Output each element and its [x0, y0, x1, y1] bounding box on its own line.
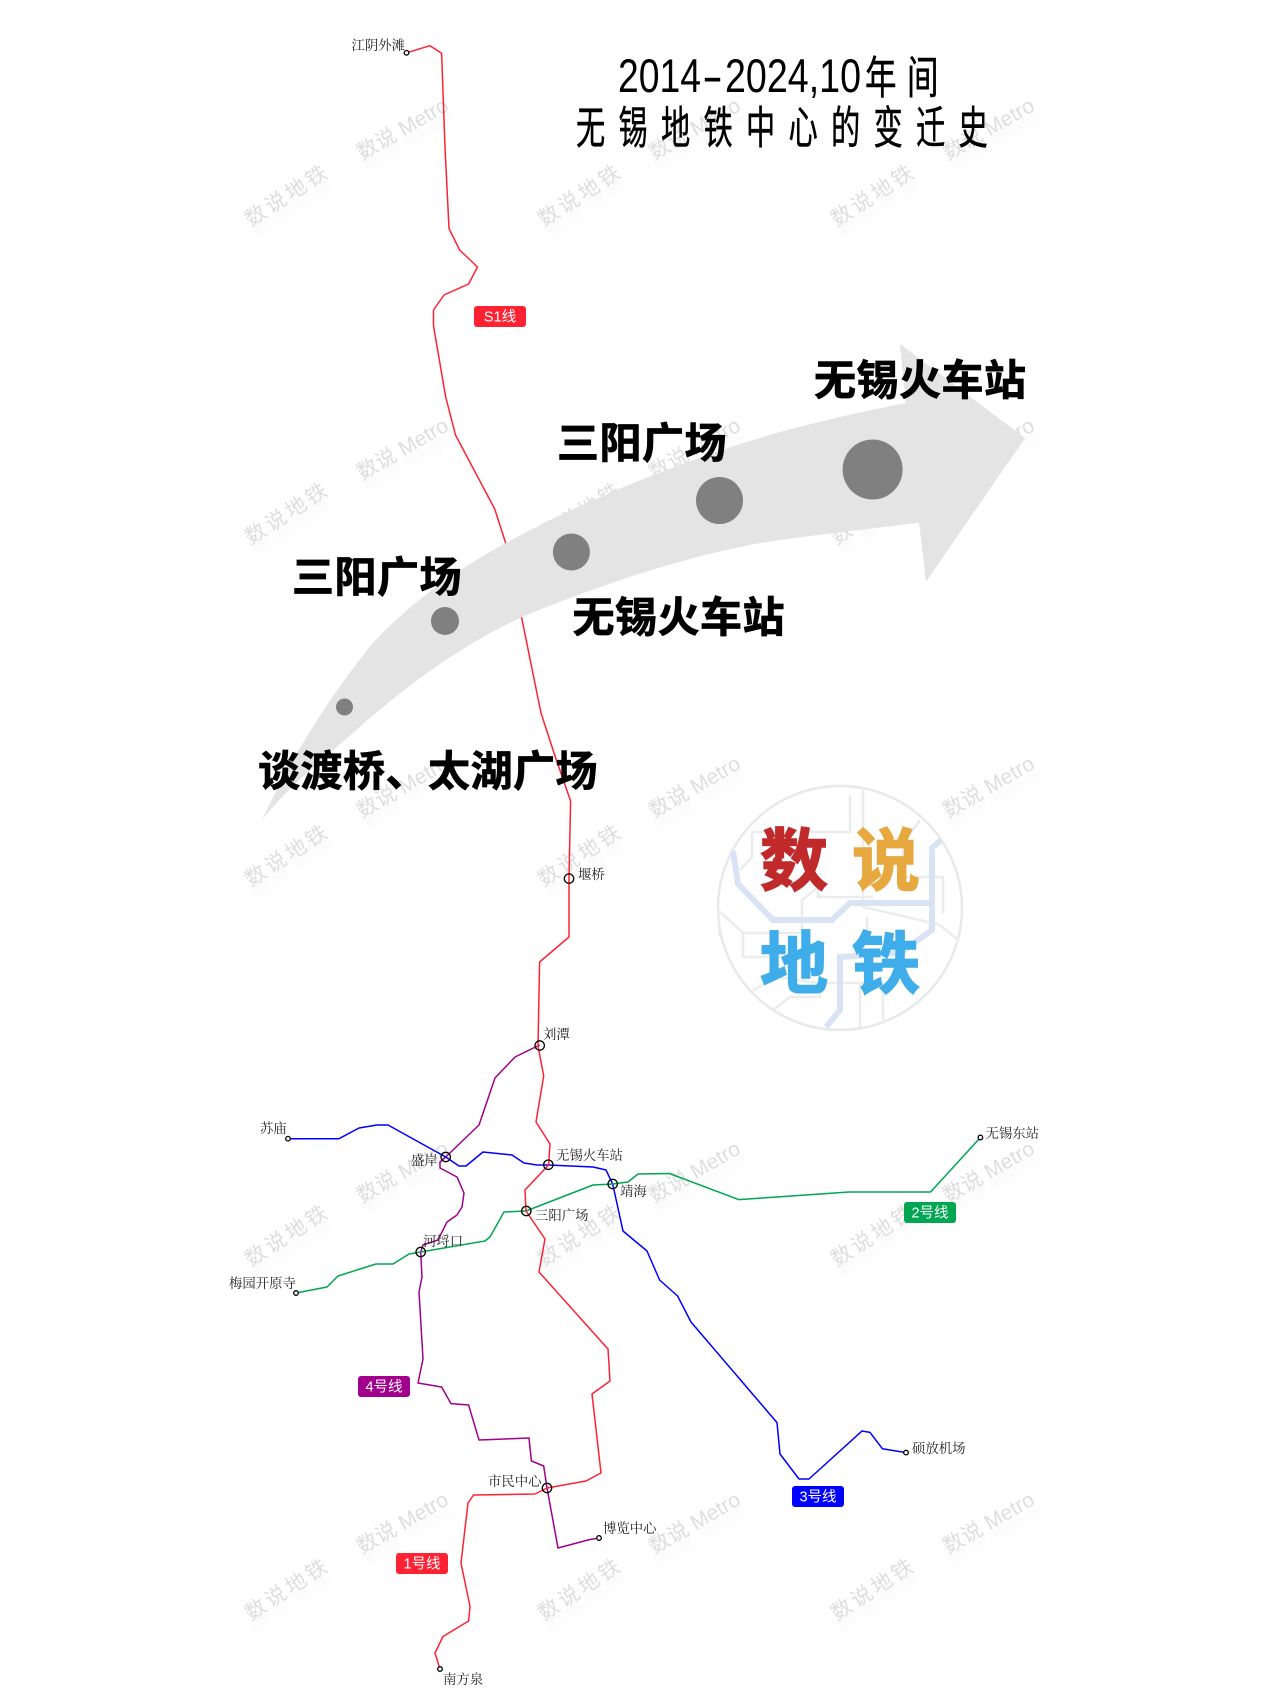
title: 年: [865, 43, 897, 107]
logo: 数说地铁: 地: [760, 927, 828, 1003]
station names: 无锡火车站: [556, 1145, 623, 1164]
watermarks: 数说 Metro: [353, 1488, 452, 1559]
station names: 梅园开原寺: [229, 1273, 296, 1292]
line badge: 3: [792, 1486, 844, 1507]
line badge: 2: [904, 1202, 956, 1223]
watermarks: 数说地铁: [534, 478, 627, 549]
line badge: S1: [474, 306, 526, 327]
watermarks: 数说地铁: [827, 1554, 920, 1625]
logo: 数说地铁: 数: [760, 824, 828, 900]
watermarks: 数说 Metro: [645, 752, 744, 823]
station names: 硕放机场: [912, 1438, 966, 1457]
station names: 靖海: [620, 1181, 647, 1200]
line badge: 2: 2号线: [911, 1204, 949, 1222]
title: [576, 43, 1001, 157]
watermarks: 数说 Metro: [353, 94, 452, 165]
station names: 江阴外滩: [352, 35, 405, 54]
station names: [229, 35, 1039, 1688]
line badge: 4: [358, 1376, 410, 1397]
line badge: 1: [396, 1553, 448, 1574]
watermarks: 数说地铁: [241, 1200, 334, 1271]
watermarks: 数说 Metro: [939, 752, 1038, 823]
logo: 数说地铁: [718, 786, 962, 1030]
station names: 刘潭: [543, 1024, 570, 1043]
watermarks: 数说 Metro: [939, 1488, 1038, 1559]
watermarks: 数说地铁: [241, 1554, 334, 1625]
arrow: growth trend: [262, 344, 1025, 820]
line badge: 4: 4号线: [365, 1378, 403, 1396]
line badge: 1: 1号线: [403, 1556, 441, 1572]
label: 无锡火车站 2024: 无锡火车站: [814, 357, 1027, 404]
terminal stations: [286, 50, 983, 1671]
label: 无锡火车站 lower: 无锡火车站: [572, 594, 785, 641]
watermarks: 数说地铁: [827, 478, 920, 549]
arrow stop markers: [336, 440, 903, 716]
watermarks: 数说地铁: [241, 160, 334, 231]
line 4: [418, 1045, 599, 1548]
watermarks: 数说地铁: [827, 160, 920, 231]
label: 三阳广场 lower: 三阳广场: [292, 554, 462, 601]
title: 无锡地铁中心的变迁史: [576, 91, 1001, 157]
watermarks: 数说地铁: [241, 820, 334, 891]
watermarks: 数说 Metro: [353, 1137, 452, 1208]
station names: 盛岸: [411, 1150, 438, 1169]
station names: 堰桥: [578, 864, 605, 883]
title: 间: [907, 43, 939, 107]
watermarks: 数说 Metro: [645, 1488, 744, 1559]
line 3: [288, 1125, 906, 1479]
watermarks: 数说地铁: [534, 1554, 627, 1625]
watermarks: 数说 Metro: [939, 94, 1038, 165]
station names: 无锡东站: [986, 1123, 1039, 1142]
watermarks: [241, 94, 1038, 1625]
station names: 河埒口: [423, 1231, 463, 1250]
line badge: 3: 3号线: [799, 1488, 837, 1506]
line 1 and S1: [406, 46, 610, 1669]
watermarks: 数说 Metro: [939, 414, 1038, 485]
station names: 苏庙: [260, 1118, 287, 1137]
line 2: [296, 1138, 980, 1293]
interchange stations: [416, 874, 617, 1493]
station names: 市民中心: [488, 1471, 542, 1490]
watermarks: 数说地铁: [241, 478, 334, 549]
watermarks: 数说 Metro: [939, 1137, 1038, 1208]
watermarks: 数说地铁: [534, 820, 627, 891]
title: 2014: [618, 49, 701, 102]
watermarks: 数说地铁: [534, 160, 627, 231]
watermarks: 数说 Metro: [645, 414, 744, 485]
label: 谈渡桥、太湖广场: 谈渡桥、太湖广场: [258, 748, 598, 795]
station names: 南方泉: [443, 1669, 483, 1688]
watermarks: 数说 Metro: [353, 752, 452, 823]
station names: 三阳广场: [535, 1205, 589, 1224]
watermarks: 数说地铁: [827, 820, 920, 891]
logo: 数说地铁: 铁: [852, 927, 920, 1003]
logo: 数说地铁: 说: [852, 824, 920, 900]
label: 三阳广场 upper: 三阳广场: [557, 420, 727, 467]
station names: 博览中心: [603, 1518, 657, 1537]
watermarks: 数说 Metro: [645, 1137, 744, 1208]
watermarks: 数说 Metro: [353, 414, 452, 485]
line badge: S1: S1线: [484, 308, 516, 326]
watermarks: 数说地铁: [827, 1200, 920, 1271]
watermarks: 数说地铁: [534, 1200, 627, 1271]
watermarks: 数说 Metro: [645, 94, 744, 165]
title: 2024,10: [725, 49, 861, 102]
title: -: [702, 49, 723, 102]
